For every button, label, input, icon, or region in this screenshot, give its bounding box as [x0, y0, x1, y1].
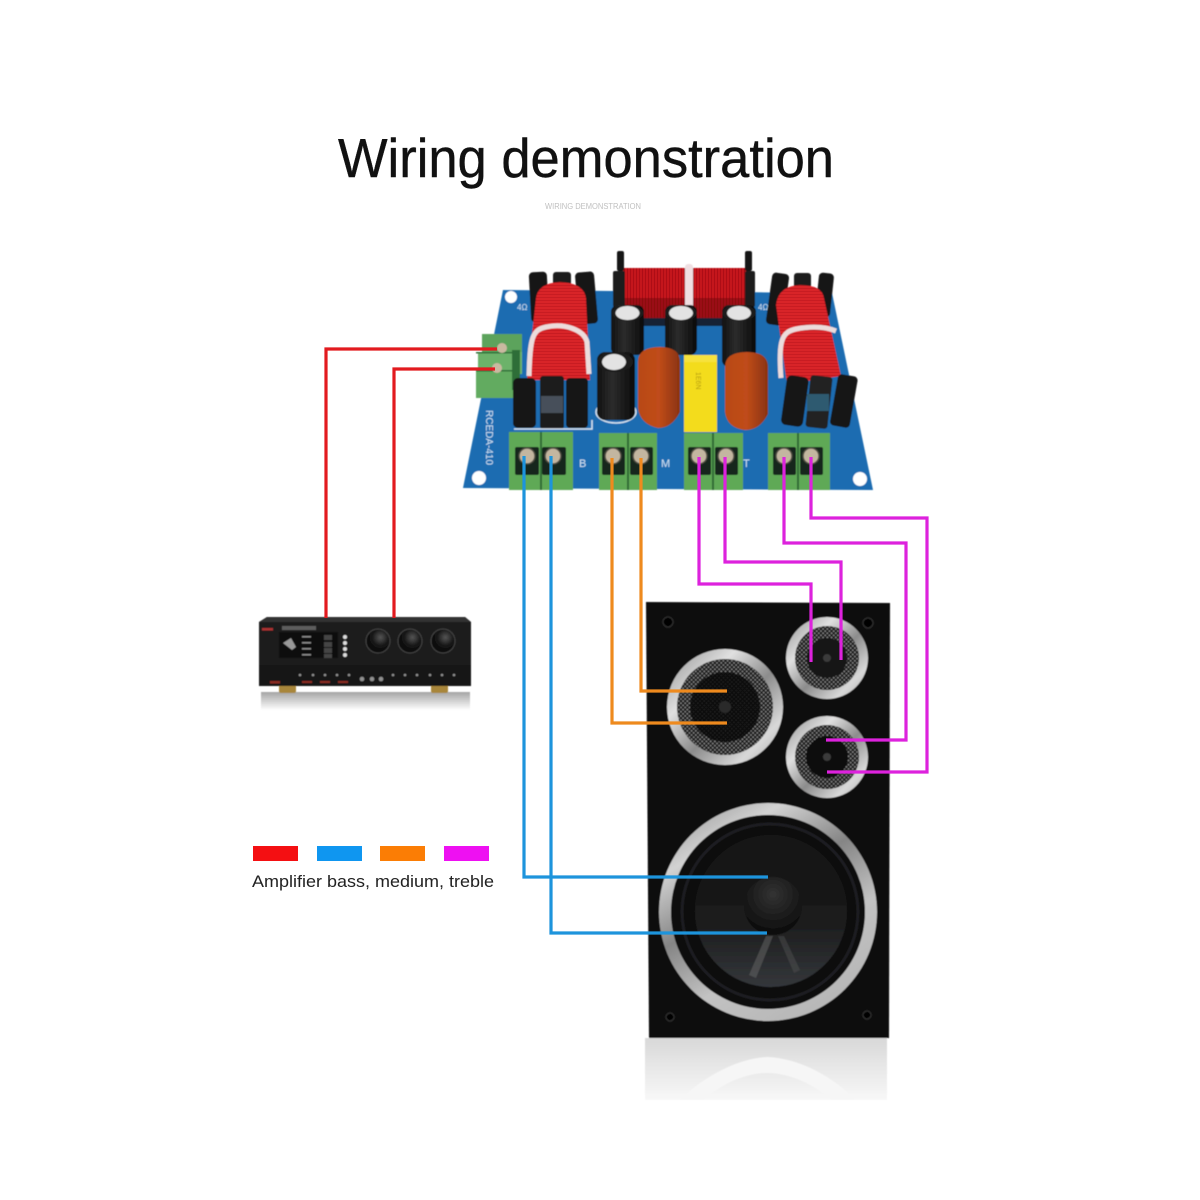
red wires: amplifier to input: [326, 349, 497, 618]
amplifier reflection: [261, 692, 470, 710]
amplifier feet: [279, 685, 296, 693]
crossover circuit board: 4Ω: [758, 303, 768, 312]
crossover circuit board: B: [579, 458, 586, 470]
orange wires: midrange: [612, 458, 727, 723]
blue PCB: [463, 290, 873, 490]
input terminal block: [476, 334, 522, 398]
crossover circuit board: M: [661, 458, 670, 470]
amplifier body: [259, 617, 471, 686]
left coil: [513, 271, 598, 429]
yellow capacitor: 1E6N: [694, 372, 701, 390]
midrange driver: [667, 649, 783, 765]
cabinet front: [646, 602, 890, 1038]
orange film capacitors: [638, 347, 768, 430]
tweeter top: [786, 617, 868, 699]
mounting holes: [663, 617, 873, 1021]
legend label: Amplifier bass, medium, treble: [252, 872, 494, 891]
top horizontal coil: [613, 251, 755, 326]
amplifier knobs: [366, 629, 390, 653]
tweeter bottom: [786, 716, 868, 798]
legend swatches: [253, 846, 489, 861]
blue wires: bass: [524, 456, 768, 933]
legend: [252, 846, 494, 891]
electrolytic capacitors: [596, 305, 756, 423]
crossover circuit board: RCEDA-410: [483, 410, 494, 465]
crossover circuit board: [463, 251, 873, 490]
crossover circuit board: 4Ω: [517, 303, 527, 312]
screw terminals: [509, 432, 830, 490]
magenta wires: treble: [699, 457, 927, 772]
amplifier controls: [299, 674, 455, 681]
amplifier display: [279, 632, 338, 658]
yellow capacitor: [684, 355, 717, 432]
amplifier: [259, 617, 471, 710]
crossover circuit board: T: [743, 458, 750, 470]
woofer: [659, 803, 877, 1021]
speaker reflection: [645, 1038, 887, 1100]
title: Wiring demonstration: [338, 127, 834, 189]
subtitle: WIRING DEMONSTRATION: [545, 202, 641, 211]
right coil: [765, 272, 858, 429]
speaker cabinet: [645, 602, 890, 1100]
